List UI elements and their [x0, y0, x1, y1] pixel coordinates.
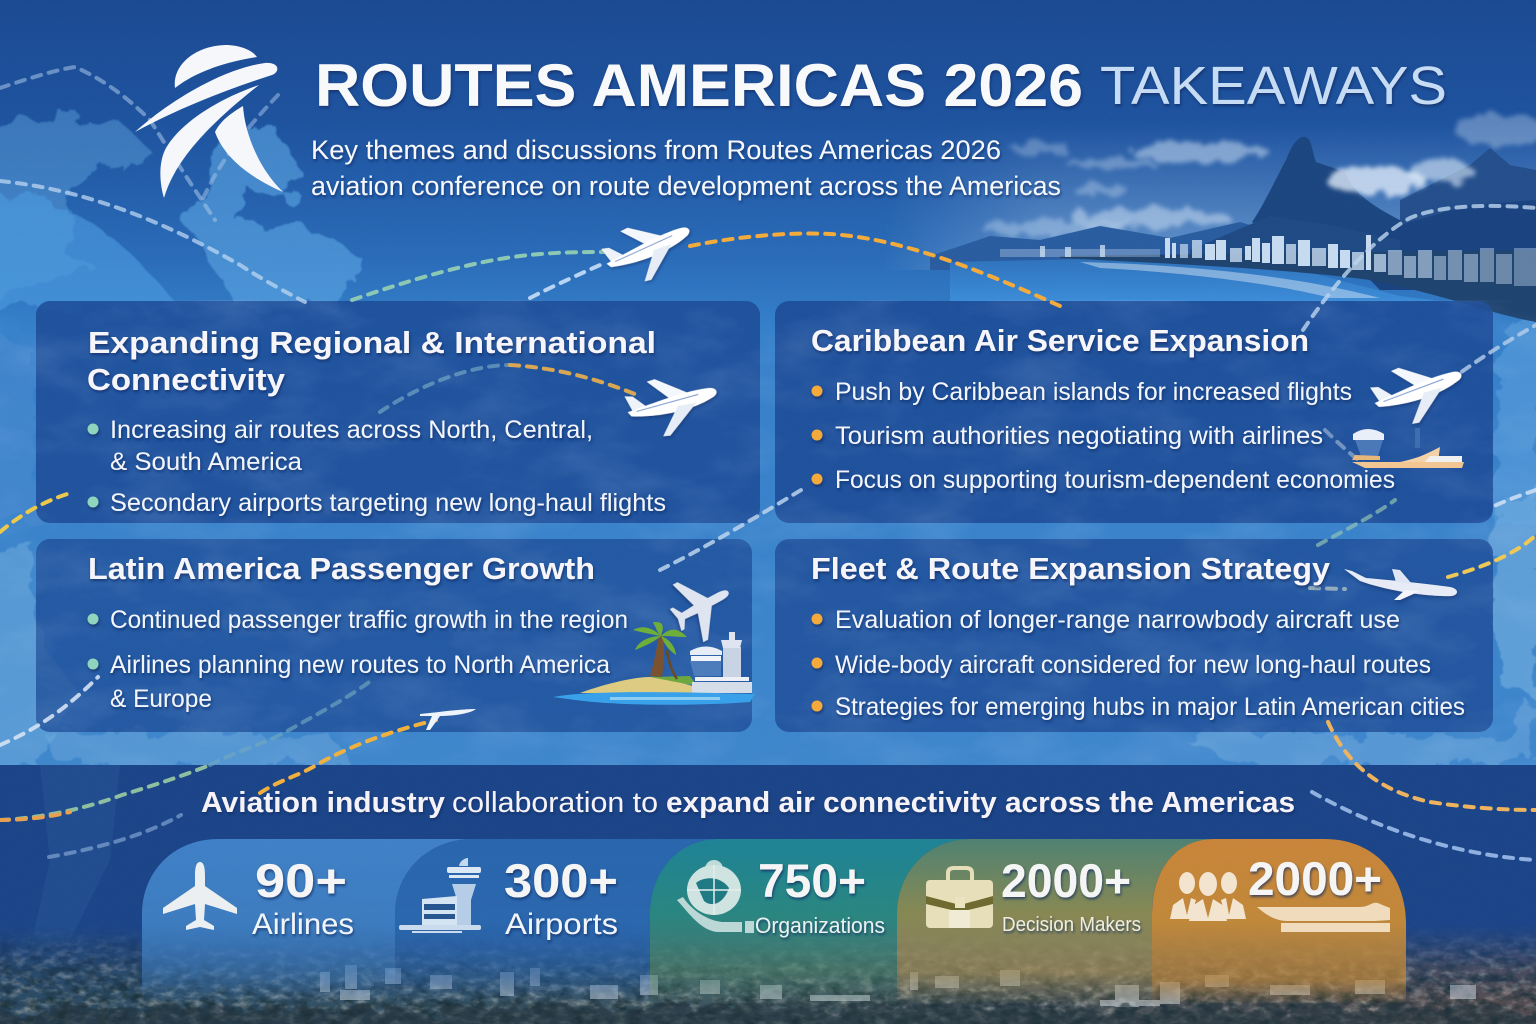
- right peak: [1400, 148, 1536, 230]
- bullets: Caribbean: Push by Caribbean islands for increased flights: [835, 378, 1352, 406]
- cloud bank over mountain: [1325, 162, 1475, 194]
- tagline: expand air connectivity across the Americas: [666, 787, 1295, 819]
- bullets: Latin America: Continued passenger traffic growth in the region: [110, 606, 628, 634]
- icon: globe in hand: [677, 860, 754, 933]
- far hills: [930, 222, 1300, 270]
- city panorama: [0, 925, 1536, 1024]
- tagline: Aviation industry: [201, 787, 445, 819]
- bullets: expanding connectivity: [88, 416, 666, 517]
- value: attendees: 2000+: [1248, 852, 1382, 905]
- icon: control tower and terminal: [399, 858, 481, 933]
- bullets: Latin America: [88, 606, 628, 713]
- value: airlines: 90+: [255, 854, 347, 907]
- bullets: Caribbean: Focus on supporting tourism-dependent economies: [835, 466, 1395, 494]
- label: decision makers: Decision Makers: [1002, 914, 1141, 936]
- bullets: expanding connectivity: Increasing air routes across North, Central,: [110, 416, 593, 444]
- bullets: fleet: [812, 606, 1465, 721]
- icon: plane: [163, 862, 237, 930]
- panel text: expanding connectivity: [87, 325, 720, 517]
- logo: [135, 45, 283, 198]
- icon: plane in connectivity panel: [623, 374, 720, 439]
- route lines: [0, 67, 1536, 860]
- icon: briefcase: [926, 868, 993, 928]
- icon: plane on headline route: [598, 213, 699, 290]
- panel: Caribbean background: [775, 301, 1493, 523]
- bullets: expanding connectivity: Secondary airports targeting new long-haul flights: [110, 489, 666, 517]
- subtitle: [311, 135, 1061, 201]
- bullets: Caribbean: Tourism authorities negotiating with airlines: [835, 422, 1323, 450]
- bullets: Latin America: & Europe: [110, 685, 212, 713]
- icon: Caribbean port and boat: [1352, 428, 1464, 468]
- faint south america on band: [30, 765, 120, 950]
- bullets: fleet: Wide-body aircraft considered for new long-haul routes: [835, 651, 1431, 679]
- subtitle: Key themes and discussions from Routes Americas 2026: [311, 135, 1001, 165]
- stat: attendees: [1170, 852, 1390, 932]
- ridge: [1340, 200, 1536, 290]
- title: ROUTES AMERICAS 2026: [315, 52, 1083, 119]
- title: TAKEAWAYS: [1100, 56, 1447, 116]
- bullets: expanding connectivity: & South America: [110, 448, 302, 476]
- label: airports: Airports: [505, 908, 618, 941]
- tagline: collaboration to: [452, 787, 658, 819]
- ocean: [950, 258, 1440, 301]
- panel: Latin America background: [36, 539, 752, 732]
- panel text: fleet: [811, 551, 1465, 721]
- panel: expanding connectivity background: [36, 301, 760, 523]
- sky: [904, 140, 1536, 270]
- panel: fleet background: [775, 539, 1493, 732]
- panel text: Caribbean: [811, 323, 1468, 494]
- title: [315, 52, 1447, 119]
- value: airports: 300+: [504, 854, 618, 907]
- icon: business people: [1170, 872, 1246, 921]
- Rio skyline scene: [880, 114, 1536, 322]
- icon: long plane: [1344, 569, 1457, 600]
- icon: plane in Caribbean panel: [1368, 357, 1468, 430]
- shore: [1060, 250, 1536, 322]
- bottom band: [0, 765, 1536, 1024]
- stat: decision makers: [926, 854, 1141, 936]
- heading: fleet: Fleet & Route Expansion Strategy: [811, 551, 1331, 586]
- bullets: Caribbean: [812, 378, 1395, 494]
- heading: expanding connectivity: Connectivity: [87, 362, 286, 397]
- clouds: [980, 114, 1536, 236]
- value: decision makers: 2000+: [1001, 854, 1131, 907]
- stat: airports: [399, 854, 618, 941]
- icon: stadium: [1257, 903, 1390, 932]
- sugarloaf mountain: [1252, 137, 1420, 250]
- label: organizations: Organizations: [755, 913, 885, 938]
- value: organizations: 750+: [758, 854, 866, 907]
- heading: Latin America: Latin America Passenger Growth: [88, 551, 595, 586]
- bullets: fleet: Strategies for emerging hubs in major Latin American cities: [835, 693, 1465, 721]
- heading: Caribbean: Caribbean Air Service Expansion: [811, 323, 1309, 358]
- subtitle: aviation conference on route development across the Americas: [311, 171, 1061, 201]
- icon: palm island and airport: [553, 622, 755, 705]
- icon: grey plane: [660, 563, 744, 649]
- label: airlines: Airlines: [252, 908, 354, 941]
- bullets: fleet: Evaluation of longer-range narrowbody aircraft use: [835, 606, 1400, 634]
- tagline: [201, 787, 1295, 819]
- world map landmasses: [0, 112, 1536, 770]
- icon: small plane on route: [420, 709, 476, 730]
- bullets: Latin America: Airlines planning new routes to North America: [110, 651, 610, 679]
- stat: airlines: [163, 854, 354, 941]
- heading: expanding connectivity: [87, 325, 656, 397]
- stat: organizations: [677, 854, 885, 938]
- panel text: Latin America: [88, 551, 755, 730]
- heading: expanding connectivity: Expanding Regional & International: [88, 325, 656, 360]
- watercolor map texture: [0, 300, 1536, 765]
- city treeline: [0, 1006, 1536, 1024]
- city skyline buildings: [1000, 235, 1536, 286]
- stat tabs: [142, 839, 1406, 1005]
